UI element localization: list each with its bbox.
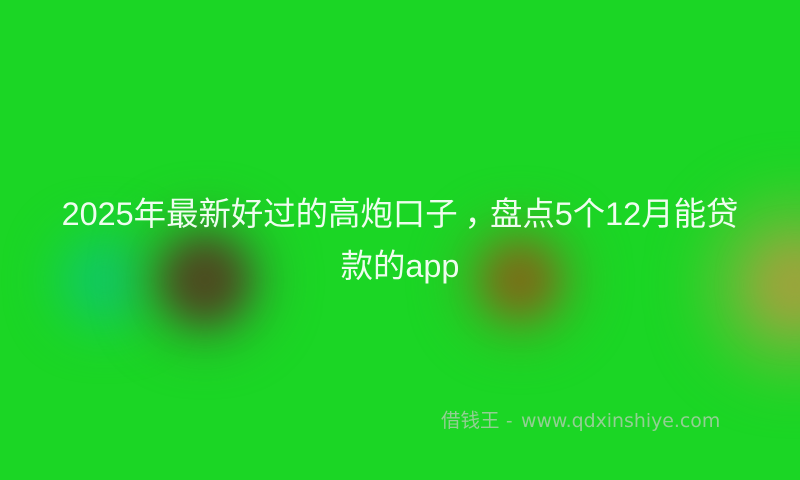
- title line 1: 2025年最新好过的高炮口子，盘点5个12月能贷: [62, 196, 738, 232]
- watermark: www.qdxinshiye.com: [521, 410, 720, 432]
- blob: dark brown core: [165, 240, 245, 320]
- blob: teal glow left: [60, 235, 150, 325]
- blob: olive brown core: [486, 246, 554, 314]
- watermark: -: [506, 410, 512, 432]
- blob: khaki right halo: [710, 200, 800, 370]
- blob: dark brown halo: [140, 215, 270, 345]
- title line 2: 款的app: [341, 248, 459, 284]
- blob: khaki right core: [755, 245, 800, 325]
- blob: olive brown halo: [460, 220, 580, 340]
- watermark: 借钱王: [441, 410, 500, 432]
